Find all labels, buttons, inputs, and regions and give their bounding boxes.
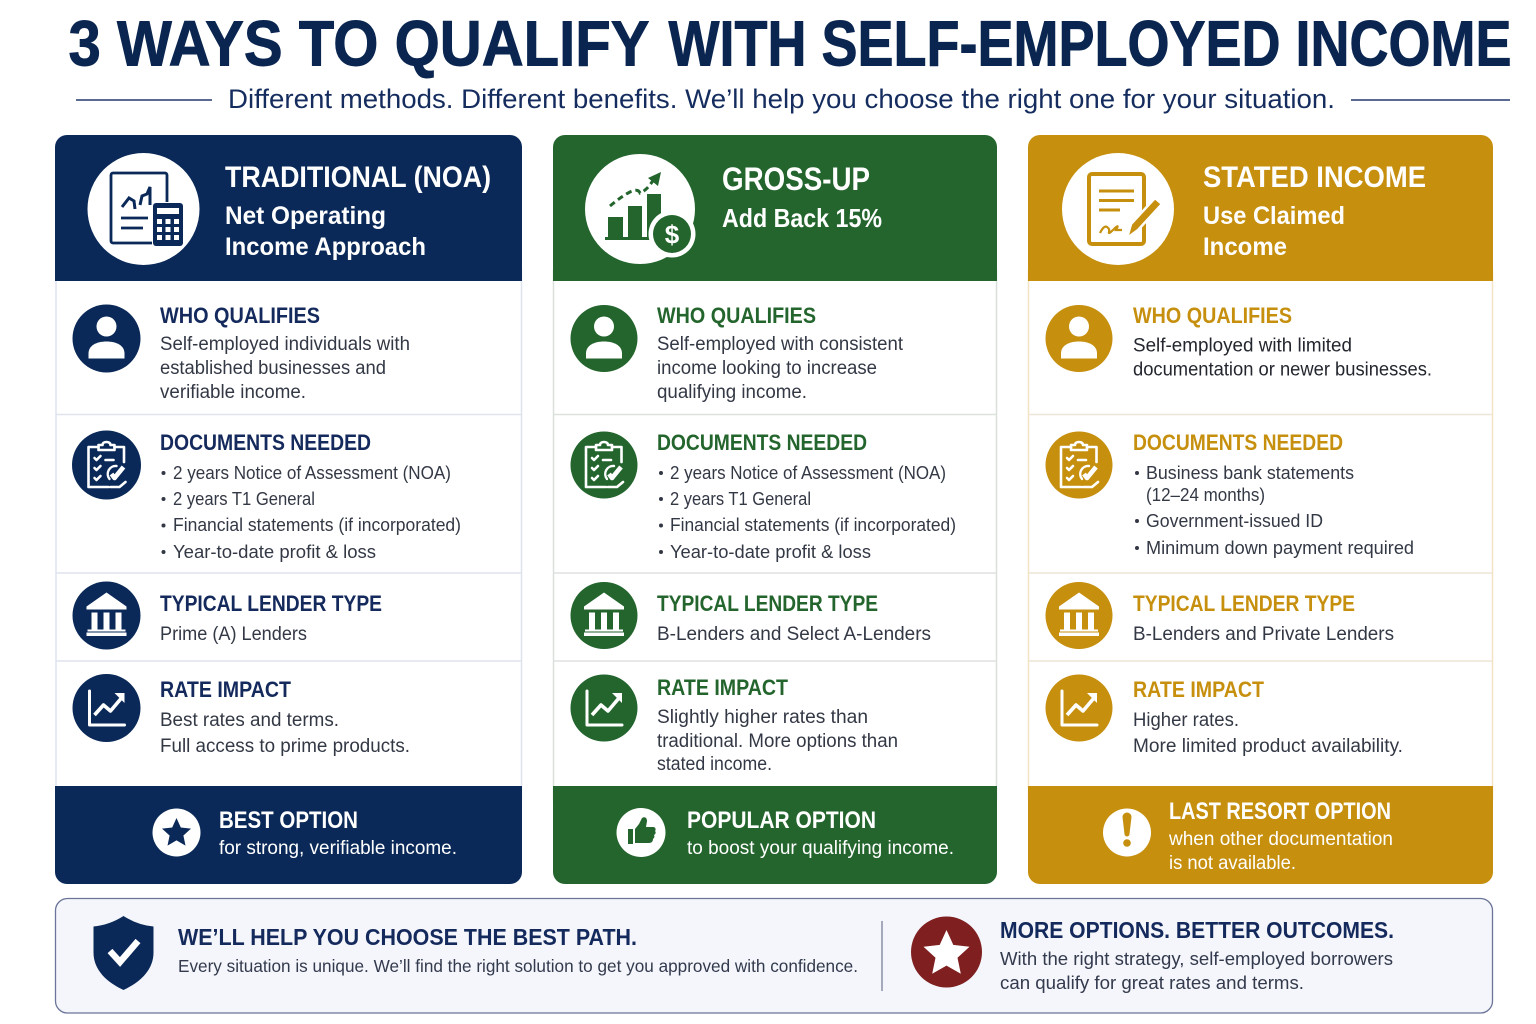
title <box>68 8 1512 80</box>
icon: red star <box>911 916 982 988</box>
row: documents needed: 2 years T1 General <box>173 489 315 509</box>
footer: last resort option: is not available. <box>1169 853 1296 874</box>
row: rate impact: Full access to prime products. <box>160 736 410 757</box>
icon: signed document <box>1062 153 1174 265</box>
row: rate impact <box>1046 674 1403 757</box>
row: lender type <box>72 582 382 650</box>
panel: stated income <box>1028 135 1493 884</box>
subtitle: Different methods. Different benefits. We’ll help you choose the right one for your situation. <box>228 84 1335 114</box>
row: rate impact: traditional. More options than <box>657 731 898 752</box>
row: who qualifies: WHO QUALIFIES <box>1133 303 1292 328</box>
row: rate impact: Slightly higher rates than <box>657 707 868 728</box>
callout: more options <box>1000 917 1394 993</box>
heading: stated income: Use Claimed <box>1203 202 1345 230</box>
footer: best option: BEST OPTION <box>219 807 358 834</box>
panel: bottom callout <box>56 898 1492 1013</box>
heading: gross-up <box>722 161 882 233</box>
row: rate impact <box>570 674 898 775</box>
row: rate impact: RATE IMPACT <box>1133 677 1264 702</box>
row: documents needed <box>72 430 461 562</box>
row: documents needed: 2 years Notice of Assessment (NOA) <box>670 463 946 483</box>
row: documents needed: (12–24 months) <box>1146 485 1265 505</box>
row: lender type: TYPICAL LENDER TYPE <box>160 591 382 616</box>
icon: growth chart with dollar: $ <box>665 220 680 250</box>
row: documents needed: Financial statements (if incorporated) <box>173 515 461 535</box>
row: lender type: B-Lenders and Private Lenders <box>1133 624 1394 645</box>
callout: more options: MORE OPTIONS. BETTER OUTCOMES. <box>1000 917 1394 943</box>
row: documents needed: DOCUMENTS NEEDED <box>1133 430 1343 455</box>
footer: best option: for strong, verifiable income. <box>219 838 457 859</box>
row: documents needed: Minimum down payment required <box>1146 538 1414 558</box>
row: rate impact: More limited product availability. <box>1133 736 1403 757</box>
footer: last resort option: LAST RESORT OPTION <box>1169 798 1391 825</box>
title: 3 WAYS TO QUALIFY <box>68 8 650 80</box>
heading: traditional <box>225 161 491 261</box>
row: documents needed: 2 years Notice of Assessment (NOA) <box>173 463 451 483</box>
icon: growth chart with dollar <box>585 154 696 264</box>
row: documents needed: Government-issued ID <box>1146 511 1323 531</box>
row: documents needed: DOCUMENTS NEEDED <box>160 430 371 455</box>
row: who qualifies: income looking to increase <box>657 358 877 379</box>
footer: popular option <box>553 786 997 884</box>
icon: star <box>152 808 200 856</box>
row: who qualifies: documentation or newer businesses. <box>1133 360 1432 380</box>
row: who qualifies <box>1046 303 1432 380</box>
footer: popular option: POPULAR OPTION <box>687 807 876 834</box>
row: who qualifies: Self-employed with limited <box>1133 336 1352 356</box>
callout: best path: WE’LL HELP YOU CHOOSE THE BEST PATH. <box>178 924 637 950</box>
icon: shield check <box>94 916 154 990</box>
row: who qualifies: qualifying income. <box>657 382 807 403</box>
footer: last resort option <box>1028 786 1493 884</box>
row: who qualifies: established businesses and <box>160 358 386 379</box>
row: rate impact: RATE IMPACT <box>657 675 788 700</box>
row: rate impact: Best rates and terms. <box>160 710 339 731</box>
heading: stated income: STATED INCOME <box>1203 161 1426 194</box>
icon: exclamation <box>1103 808 1151 856</box>
footer: best option <box>55 786 522 884</box>
callout: best path: Every situation is unique. We’ll find the right solution to get you approved with confidence. <box>178 956 858 976</box>
row: documents needed <box>1046 430 1414 558</box>
row: rate impact: Higher rates. <box>1133 710 1239 731</box>
heading: gross-up: Add Back 15% <box>722 203 882 233</box>
row: documents needed: Year-to-date profit & loss <box>173 542 376 562</box>
row: documents needed <box>570 430 956 562</box>
row: documents needed: Business bank statements <box>1146 463 1354 483</box>
row: who qualifies: WHO QUALIFIES <box>657 303 816 328</box>
row: lender type: TYPICAL LENDER TYPE <box>1133 591 1355 616</box>
panel: gross-up <box>553 135 997 884</box>
icon: thumbs up <box>616 808 666 857</box>
heading: traditional: TRADITIONAL (NOA) <box>225 161 491 194</box>
row: lender type: TYPICAL LENDER TYPE <box>657 591 878 616</box>
header: traditional <box>55 135 522 281</box>
row: lender type: Prime (A) Lenders <box>160 624 307 645</box>
footer: popular option: to boost your qualifying income. <box>687 838 954 859</box>
header: gross-up <box>553 135 997 281</box>
row: documents needed: DOCUMENTS NEEDED <box>657 430 867 455</box>
heading: stated income <box>1203 161 1426 261</box>
row: documents needed: 2 years T1 General <box>670 489 811 509</box>
icon: report and calculator <box>88 153 200 265</box>
row: documents needed: Year-to-date profit & loss <box>670 542 871 562</box>
row: who qualifies: Self-employed with consistent <box>657 334 904 355</box>
row: rate impact: RATE IMPACT <box>160 677 291 702</box>
callout: more options: can qualify for great rates and terms. <box>1000 973 1304 993</box>
row: who qualifies: Self-employed individuals with <box>160 334 410 355</box>
row: lender type <box>1046 582 1394 649</box>
callout: best path <box>178 924 858 976</box>
row: who qualifies <box>72 303 410 403</box>
heading: traditional: Net Operating <box>225 202 386 230</box>
row: documents needed: Financial statements (if incorporated) <box>670 515 956 535</box>
heading: gross-up: GROSS-UP <box>722 161 870 197</box>
row: rate impact <box>72 674 410 757</box>
heading: stated income: Income <box>1203 233 1287 261</box>
callout: more options: With the right strategy, self-employed borrowers <box>1000 949 1393 969</box>
footer: last resort option: when other documentation <box>1168 829 1393 850</box>
row: lender type: B-Lenders and Select A-Lenders <box>657 624 931 645</box>
panel: traditional <box>55 135 522 884</box>
row: lender type <box>570 582 931 649</box>
row: rate impact: stated income. <box>657 754 772 775</box>
row: who qualifies: WHO QUALIFIES <box>160 303 320 328</box>
row: who qualifies <box>570 303 904 403</box>
heading: traditional: Income Approach <box>225 233 426 261</box>
row: who qualifies: verifiable income. <box>160 382 306 403</box>
header: stated income <box>1028 135 1493 281</box>
